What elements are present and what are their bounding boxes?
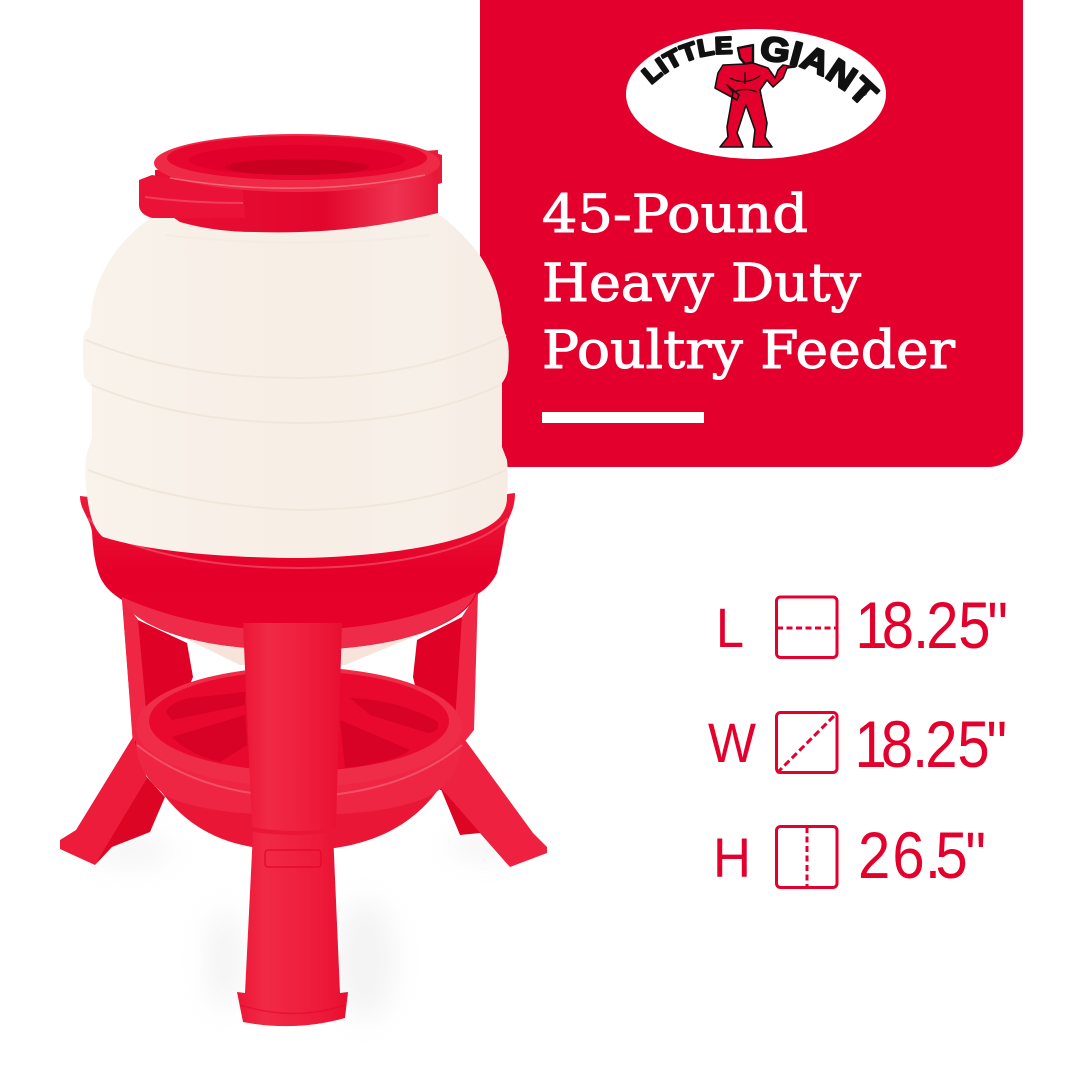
dimension: length: 18.25" (855, 590, 1008, 663)
bin body (83, 213, 509, 558)
tray interior (149, 671, 449, 771)
saucer base (80, 493, 515, 650)
lid skirt (155, 150, 438, 232)
logo strongman figure (715, 45, 795, 147)
dimension: length: L (716, 596, 744, 659)
tray outer rim (136, 667, 462, 787)
dimension: width: 18.25" (854, 709, 1007, 782)
heading: Heavy Duty (542, 254, 862, 314)
bin ribs (86, 235, 506, 510)
heading: 45-Pound (542, 185, 808, 245)
dimensions (708, 590, 1008, 893)
panel: red title panel (480, 0, 1023, 467)
dimension: width (708, 709, 1007, 782)
dimension: width: W (708, 711, 756, 774)
icon: height box (776, 826, 837, 888)
icon: width box (776, 712, 837, 773)
logo: Little Giant (626, 29, 886, 159)
logo wordmark: LITTLE (640, 36, 733, 85)
rear left leg (60, 597, 193, 865)
saucer lip highlight (88, 518, 508, 568)
tray bowl (160, 790, 438, 851)
dimension: height: H (713, 826, 751, 889)
front leg upper (243, 623, 342, 831)
icon: length box (776, 597, 837, 658)
front leg lower (237, 832, 348, 1026)
lid left handle (139, 175, 245, 218)
lid (139, 134, 442, 232)
logo wordmark (640, 36, 880, 104)
tray lower band (136, 735, 462, 815)
dimension: length (716, 590, 1008, 663)
lid right tab (425, 150, 442, 185)
logo wordmark: GIANT (760, 36, 880, 104)
saucer lower band (122, 592, 476, 650)
product: poultry feeder (60, 134, 547, 1026)
dimension: height (713, 820, 986, 893)
registered mark: ® (860, 88, 868, 99)
lid top rim (154, 134, 440, 192)
heading: Poultry Feeder (542, 321, 955, 381)
rear right leg (413, 592, 547, 867)
cream hopper cone (168, 630, 430, 665)
heading (542, 185, 955, 381)
dimension: height: 26.5" (858, 820, 986, 893)
floor shadows (88, 831, 520, 1020)
heading underline (542, 412, 704, 423)
logo oval (626, 29, 886, 159)
tray feed slots (166, 692, 438, 768)
